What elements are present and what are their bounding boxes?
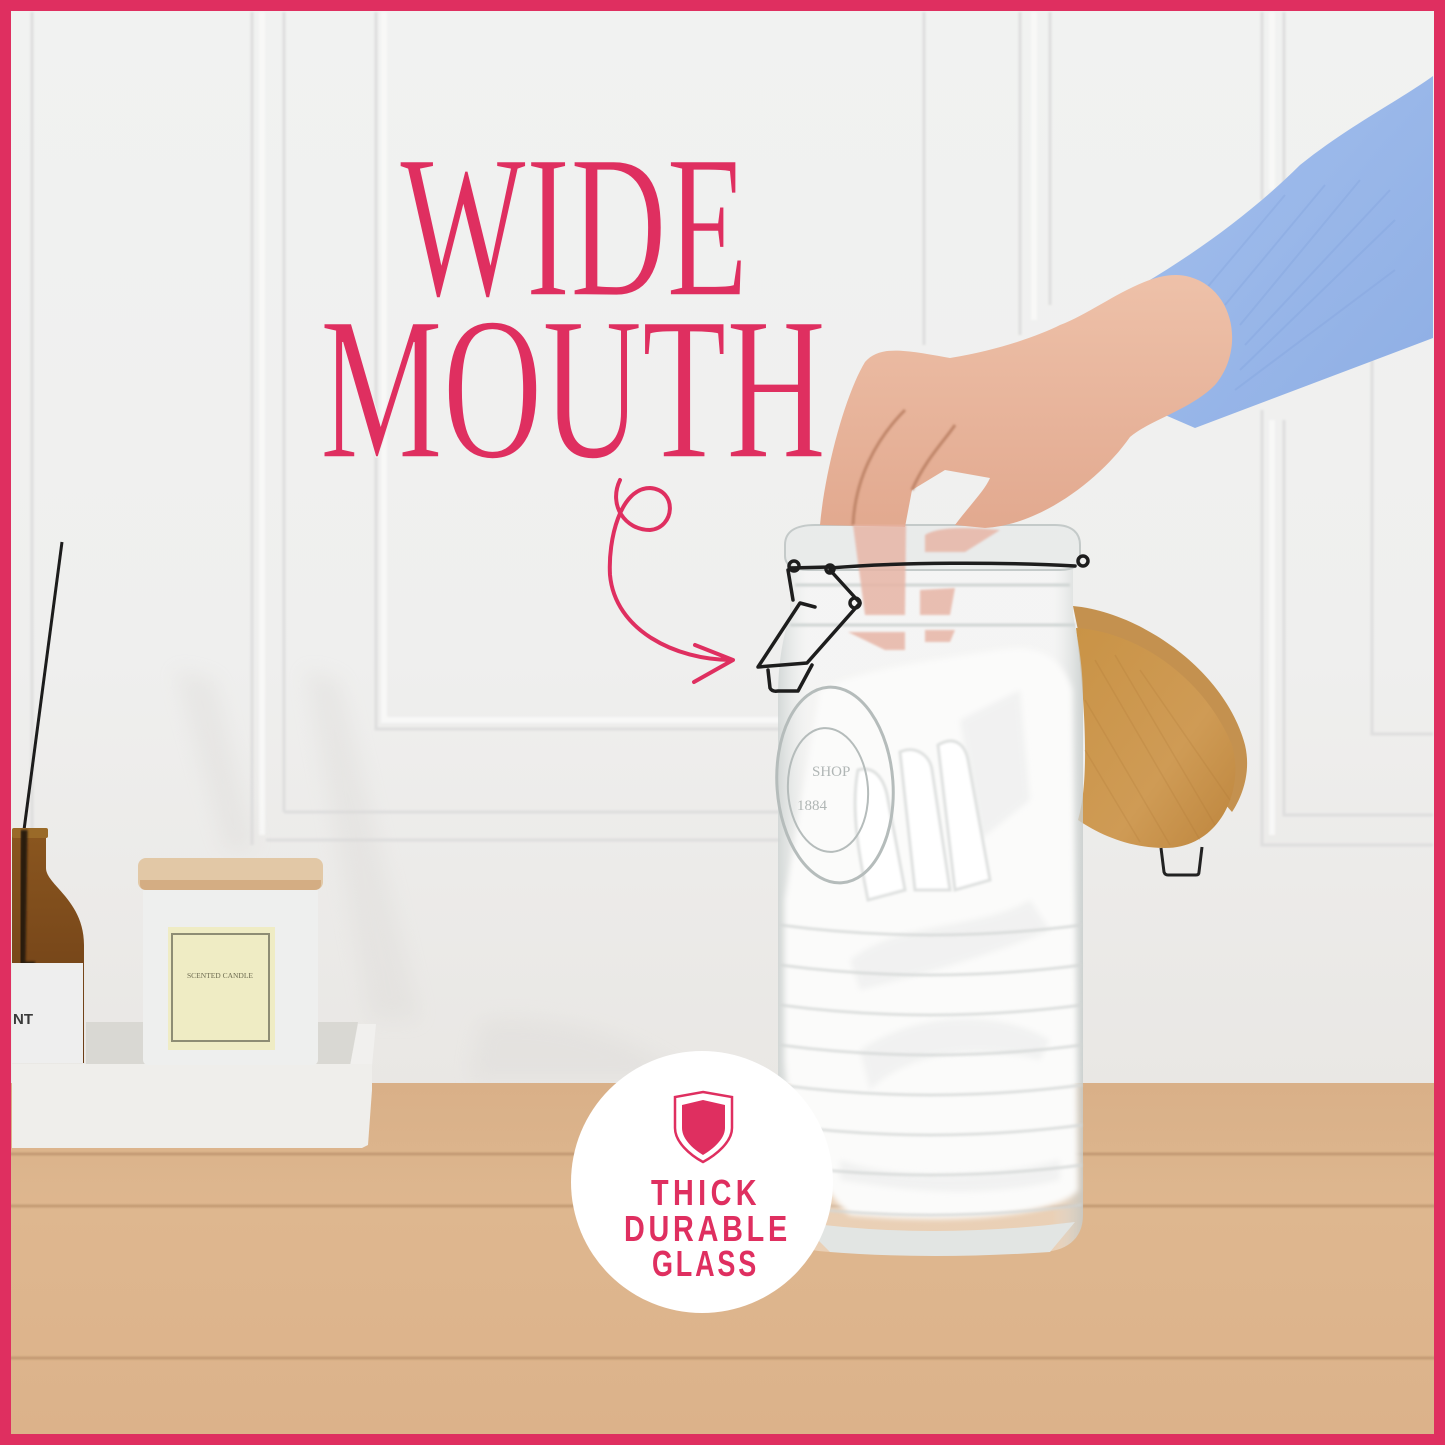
badge text: DURABLE [624, 1208, 787, 1249]
jar ribs [780, 925, 1082, 1215]
badge text: THICK [651, 1172, 757, 1213]
jar base [800, 1222, 1075, 1256]
icon: shield [675, 1092, 732, 1162]
diffuser bottle and reed [12, 542, 84, 1063]
embossed jar emblem: SHOP [812, 764, 850, 780]
badge text: GLASS [652, 1243, 756, 1284]
jar rim [785, 525, 1080, 570]
title: Wide Mouth: MOUTH [320, 276, 826, 502]
fingers seen through glass [848, 525, 1000, 650]
soft wall shadows [175, 670, 690, 1080]
wall panel mouldings [32, 12, 1433, 845]
embossed jar emblem: 1884 [797, 798, 828, 814]
lid wire handle [1161, 847, 1202, 875]
candle label text: SCENTED CANDLE [187, 971, 253, 980]
title: Wide Mouth: WIDE [400, 114, 748, 340]
scented candle [138, 858, 323, 1065]
white tray [12, 1022, 376, 1148]
hand reaching into jar [820, 275, 1232, 650]
badge: thick durable glass [571, 1051, 833, 1313]
wire clasp [758, 556, 1088, 691]
glass jar with cotton pads [770, 525, 1083, 1256]
embossed jar emblem [770, 683, 900, 887]
sleeve [1118, 76, 1433, 428]
bottle label text: NT [13, 1011, 33, 1028]
badge text [624, 1172, 787, 1284]
title: Wide Mouth [320, 114, 826, 502]
wall background [0, 0, 1445, 1090]
open wooden lid [1073, 606, 1247, 875]
folded cotton pad stack [855, 741, 990, 900]
table top [0, 1083, 1445, 1445]
curly arrow [610, 480, 733, 682]
